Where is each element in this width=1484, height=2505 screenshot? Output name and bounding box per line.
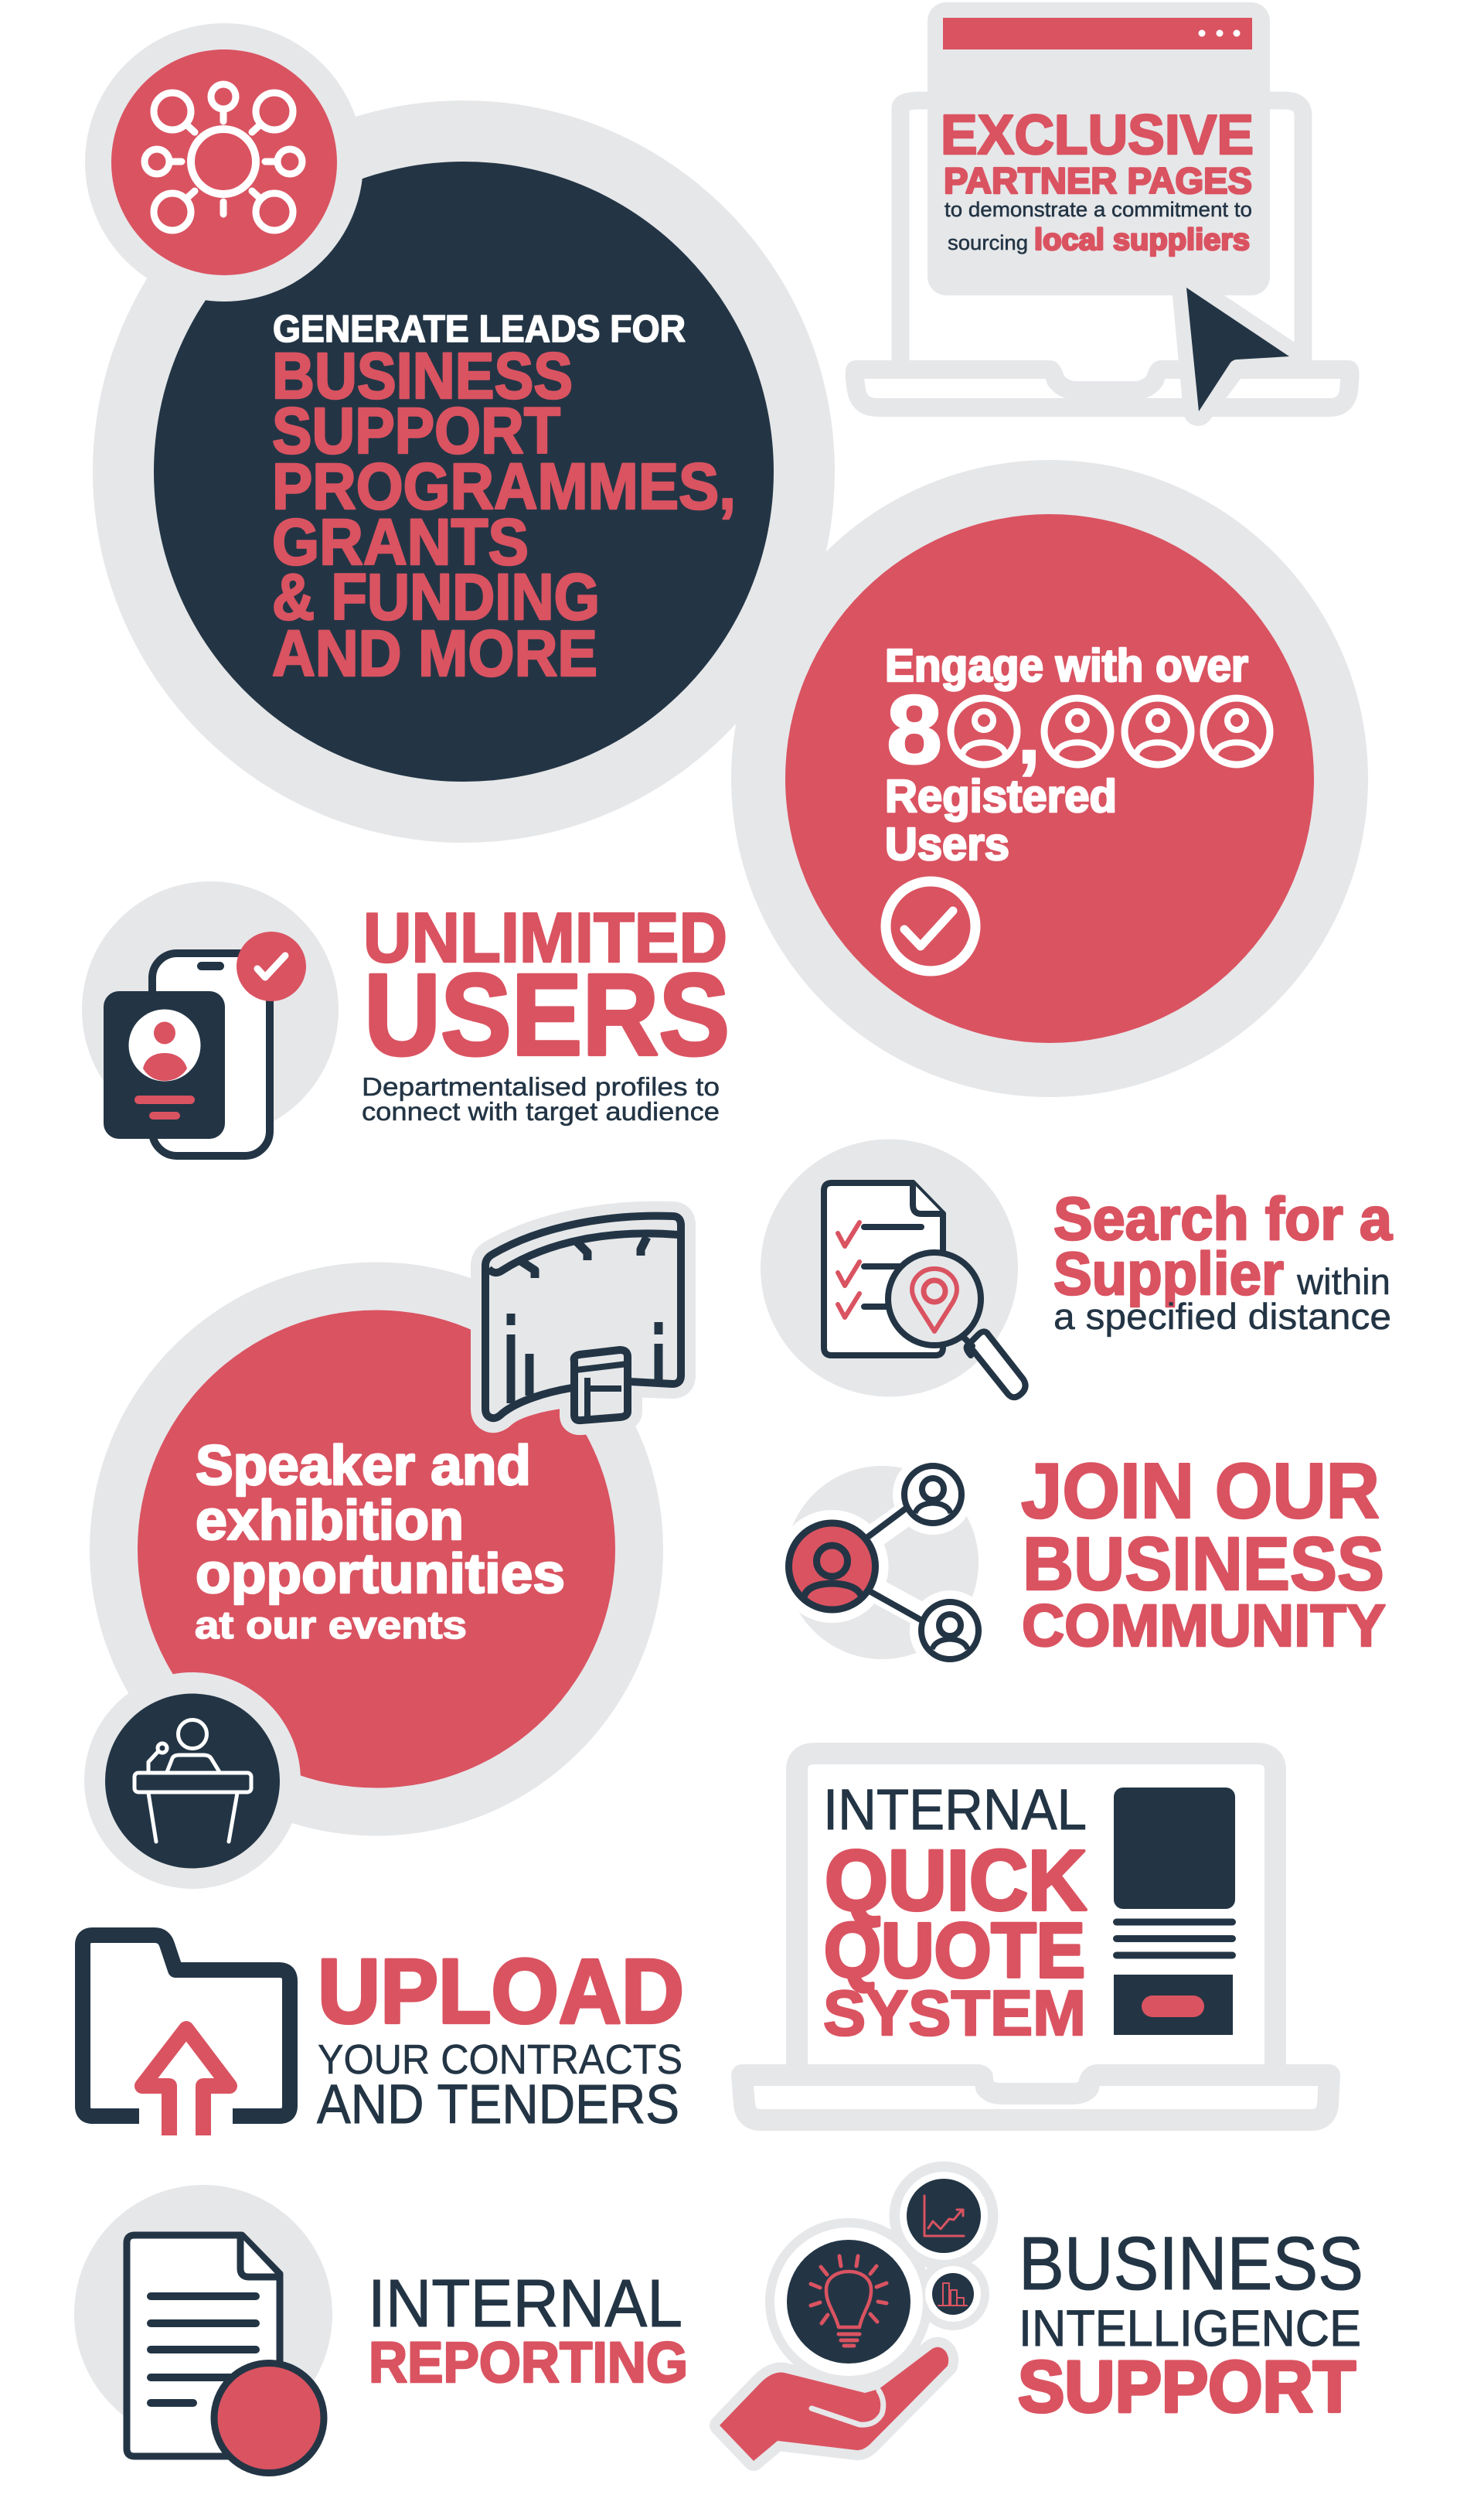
heading: join our business community: [1021, 1448, 1386, 1659]
heading: unlimited users: USERS: [364, 949, 730, 1079]
panel: internal reporting: [74, 2185, 688, 2473]
icon: exhibition stand: [485, 1216, 681, 1420]
heading: internal quick quote system: [823, 1777, 1087, 2049]
icon: folder with upload arrow: [83, 1935, 290, 2135]
heading: unlimited users: UNLIMITED: [363, 899, 727, 977]
heading: generate leads: GENERATE LEADS FOR: [273, 308, 686, 350]
heading: exclusive partner pages: EXCLUSIVE: [941, 104, 1254, 166]
panel: join our business community: [776, 1448, 1386, 1671]
heading: generate leads: [272, 308, 736, 690]
heading: generate leads: SUPPORT: [272, 394, 560, 467]
icon: speaker at lectern: [84, 1672, 301, 1889]
heading: upload your contracts and tenders: AND TENDERS: [317, 2074, 679, 2135]
icon: laptop outline: [855, 101, 1350, 407]
icon: phone and profile card: [104, 932, 306, 1156]
heading: upload your contracts and tenders: [317, 1941, 684, 2135]
heading: search for a supplier: Supplier: [1053, 1239, 1284, 1307]
heading: generate leads: & FUNDING: [272, 561, 600, 633]
heading: business intelligence support: INTELLIGENCE: [1019, 2299, 1361, 2357]
icon: connected people: [776, 1454, 990, 1671]
panel: internal quick quote system: [742, 1754, 1329, 2120]
heading: generate leads: AND MORE: [272, 617, 597, 690]
text: speaker and exhibition opportunities: [195, 1435, 565, 1647]
text: speaker and exhibition opportunities: at our events: [195, 1604, 467, 1647]
heading: search for a supplier: [1053, 1184, 1393, 1337]
heading: search for a supplier: Search for a: [1053, 1184, 1393, 1252]
panel: speaker and exhibition: [84, 1216, 681, 1889]
heading: upload your contracts and tenders: UPLOAD: [318, 1941, 684, 2043]
icon: hand holding ideas: [720, 2162, 999, 2461]
heading: generate leads: BUSINESS: [272, 339, 573, 412]
heading: exclusive partner pages: sourcing: [948, 231, 1028, 254]
panel: generate leads circle: [85, 23, 835, 843]
heading: business intelligence support: [1018, 2221, 1363, 2427]
heading: internal quick quote system: QUOTE: [824, 1907, 1085, 1994]
text: departmentalised profiles: [362, 1072, 720, 1126]
number: 80,000 with user icons: [887, 675, 1270, 784]
heading: internal reporting: REPORTING: [369, 2330, 688, 2394]
heading: generate leads: PROGRAMMES,: [272, 450, 736, 523]
text: departmentalised profiles: connect with target audience: [362, 1097, 720, 1126]
icon: cursor arrow: [1186, 288, 1289, 411]
heading: search for a supplier: a specified distance: [1053, 1296, 1391, 1337]
panel: business intelligence support: [720, 2162, 1363, 2461]
heading: generate leads: GRANTS: [272, 506, 529, 578]
text: registered users: [885, 771, 1117, 870]
webpage mockup: [1113, 1788, 1236, 2035]
heading: internal quick quote system: SYSTEM: [823, 1977, 1086, 2049]
heading: business intelligence support: BUSINESS: [1019, 2221, 1363, 2306]
text: registered users: Registered: [885, 771, 1117, 822]
heading: internal quick quote system: INTERNAL: [823, 1777, 1087, 1842]
heading: internal reporting: INTERNAL: [368, 2266, 682, 2341]
heading: join our business community: COMMUNITY: [1022, 1593, 1386, 1659]
heading: business intelligence support: SUPPORT: [1018, 2346, 1356, 2427]
browser window: [928, 2, 1270, 295]
icon: network hub: [145, 84, 302, 230]
heading: internal quick quote system: QUICK: [825, 1833, 1087, 1928]
number: 80,000 with user icons: 8: [887, 675, 942, 784]
heading: join our business community: BUSINESS: [1023, 1522, 1384, 1606]
number: 80,000 with user icons: ,: [1017, 687, 1041, 782]
heading: exclusive partner pages: PARTNER PAGES: [944, 160, 1252, 201]
heading: upload your contracts and tenders: YOUR CONTRACTS: [318, 2036, 682, 2083]
icon: report document: [127, 2235, 324, 2473]
text: speaker and exhibition opportunities: exhibition: [196, 1490, 464, 1552]
heading: join our business community: JOIN OUR: [1021, 1448, 1380, 1535]
text: speaker and exhibition opportunities: opportunities: [196, 1543, 565, 1605]
panel: engage with registered users: [731, 460, 1368, 1097]
heading: exclusive partner pages: to demonstrate a commitment to: [945, 198, 1252, 221]
panel: upload contracts: [83, 1935, 684, 2135]
panel: search for a supplier: [761, 1140, 1393, 1397]
panel: unlimited users: [82, 881, 730, 1156]
icon: check circle: [886, 881, 975, 971]
text: engage with over: Engage with over: [885, 640, 1248, 691]
heading: exclusive partner pages: [941, 104, 1254, 257]
text: departmentalised profiles: Departmentalised profiles to: [362, 1072, 720, 1101]
icon: checklist and magnifier: [824, 1183, 1026, 1397]
text: speaker and exhibition opportunities: Speaker and: [196, 1435, 531, 1497]
panel: exclusive partner pages laptop: [855, 2, 1350, 411]
heading: search for a supplier: within: [1296, 1261, 1390, 1302]
heading: exclusive partner pages: local suppliers: [1034, 223, 1250, 257]
heading: internal reporting: [368, 2266, 688, 2394]
icon: laptop outline: [742, 1754, 1329, 2120]
text: registered users: Users: [885, 819, 1009, 870]
heading: unlimited users: [363, 899, 730, 1079]
